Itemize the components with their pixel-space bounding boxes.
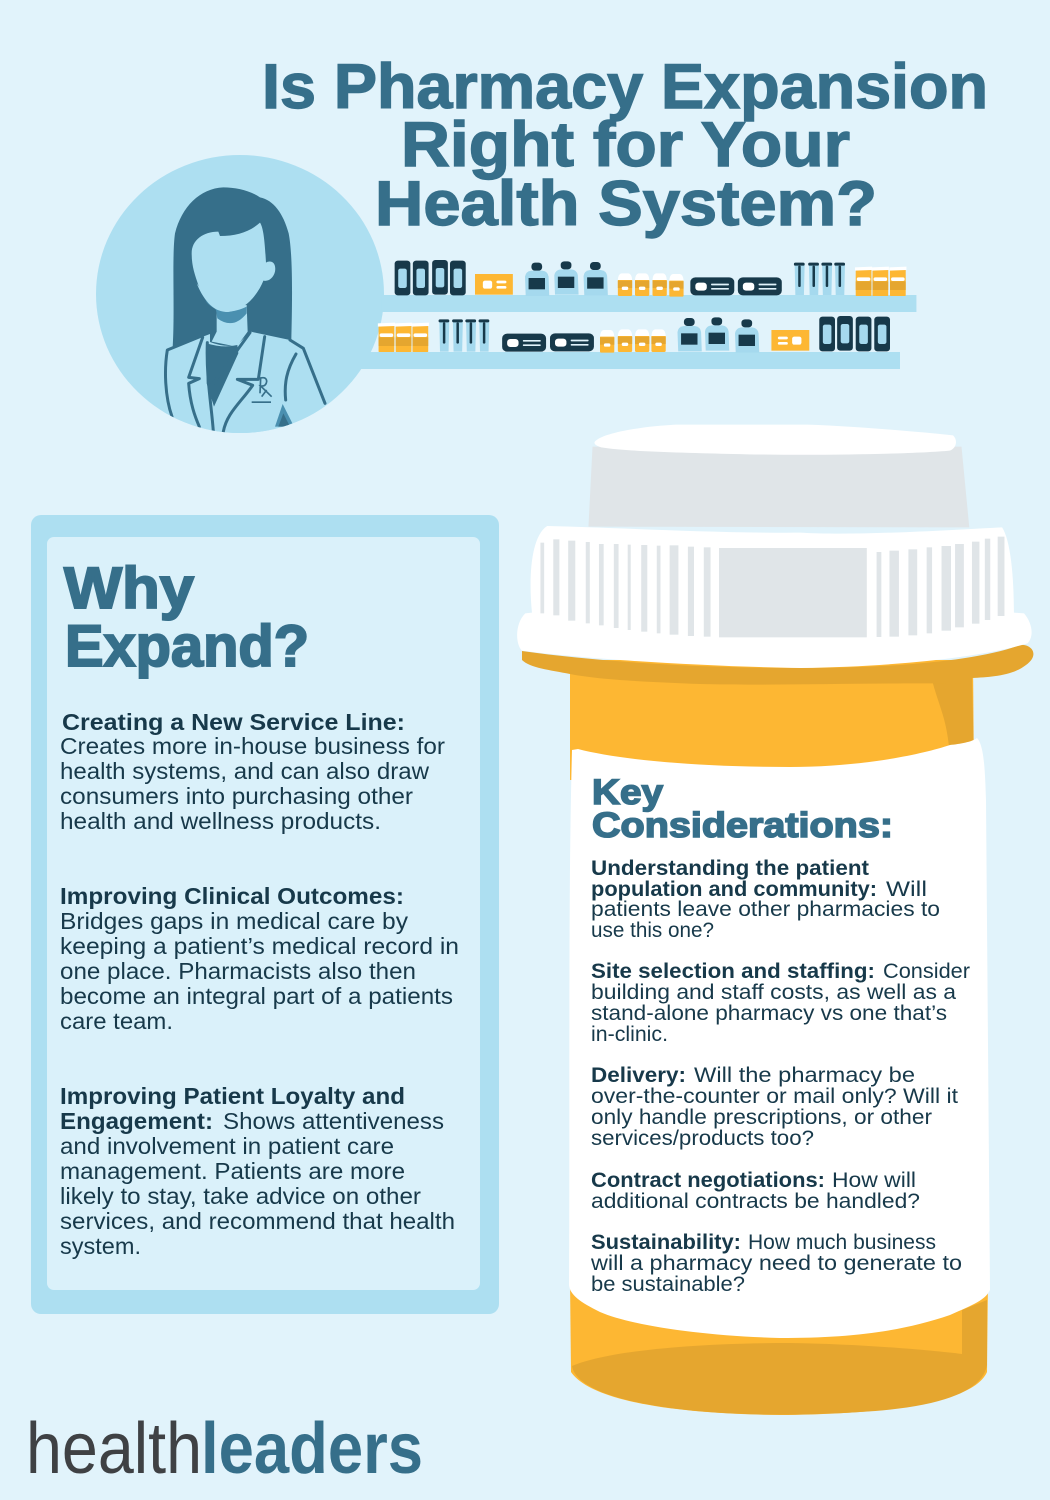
text: sustainability: Sustainability: [591, 1230, 741, 1254]
text: improving patient loyalty: system. [60, 1233, 141, 1259]
text: site selection: Site selection and staffing: [591, 959, 875, 983]
text: contract negotiations: additional contracts be handled? [591, 1189, 920, 1213]
text: site selection: stand-alone pharmacy vs one that’s [591, 1001, 947, 1025]
shelves with medicine [360, 260, 916, 369]
text: understanding the patient: Understanding the patient [591, 856, 869, 880]
logo: healthleaders [26, 1409, 423, 1489]
text: improving patient loyalty [60, 1083, 455, 1259]
text: creating a new service line: health systems, and can also draw [60, 758, 430, 784]
heading: key considerations [592, 773, 893, 845]
text: creating a new service line: Creates more in-house business for [60, 733, 445, 759]
text: sustainability: be sustainable? [591, 1272, 745, 1296]
text: site selection [591, 959, 970, 1046]
heading: why expand: Why [64, 556, 194, 621]
heading: key considerations: Key [592, 773, 664, 812]
text: contract negotiations [591, 1168, 920, 1213]
text: delivery: Will the pharmacy be [694, 1063, 915, 1087]
heading: key considerations: Considerations: [592, 806, 893, 845]
text: delivery: over-the-counter or mail only? Will it [591, 1084, 958, 1108]
text: creating a new service line [60, 709, 445, 834]
text: delivery: Delivery: [591, 1063, 686, 1087]
text: understanding the patient: use this one? [591, 918, 714, 942]
text: site selection: Consider [883, 959, 970, 983]
text: improving patient loyalty: and involvement in patient care [60, 1133, 394, 1159]
text: improving clinical outcomes: become an integral part of a patients [60, 983, 453, 1009]
text: understanding the patient: patients leave other pharmacies to [591, 897, 940, 921]
text: delivery [591, 1063, 958, 1150]
title: Health System? [375, 169, 877, 239]
text: contract negotiations: Contract negotiations: [591, 1168, 825, 1192]
title: Right for Your [401, 110, 850, 180]
text: understanding the patient: population and community: [591, 877, 877, 901]
title: Is Pharmacy Expansion [262, 52, 988, 122]
text: creating a new service line: health and wellness products. [60, 808, 381, 834]
text: sustainability: will a pharmacy need to generate to [590, 1251, 962, 1275]
circle portrait background [96, 155, 384, 433]
bottle body lower [570, 1280, 988, 1415]
text: improving clinical outcomes: Bridges gaps in medical care by [60, 908, 408, 934]
text: site selection: building and staff costs, as well as a [591, 980, 956, 1004]
text: understanding the patient: Will [886, 877, 927, 901]
bottle neck [570, 660, 974, 780]
text: key considerations [590, 773, 970, 1296]
text: delivery: services/products too? [591, 1126, 814, 1150]
text: improving patient loyalty: services, and recommend that health [60, 1208, 455, 1234]
text: improving clinical outcomes: one place. Pharmacists also then [60, 958, 416, 984]
logo: healthleaders: leaders [201, 1409, 423, 1489]
text: improving patient loyalty: management. Patients are more [60, 1158, 405, 1184]
icon: pharmacist [162, 187, 330, 443]
bottle cap [517, 425, 1032, 668]
text: improving clinical outcomes: Improving Clinical Outcomes: [60, 883, 404, 909]
icon: pill bottle [517, 425, 1033, 1415]
text: improving patient loyalty: Engagement: [60, 1108, 213, 1134]
heading: why expand [64, 556, 309, 679]
text: improving patient loyalty: Improving Patient Loyalty and [60, 1083, 405, 1109]
bottle label [569, 738, 990, 1338]
text: sustainability: How much business [748, 1230, 936, 1254]
panel: why expand [31, 515, 499, 1314]
text: creating a new service line: consumers into purchasing other [60, 783, 413, 809]
text: improving patient loyalty: Shows attentiveness [223, 1108, 444, 1134]
shelf: upper [381, 295, 916, 312]
text: improving clinical outcomes: care team. [60, 1008, 173, 1034]
text: improving clinical outcomes [60, 883, 459, 1034]
title [262, 52, 988, 239]
text: creating a new service line: Creating a New Service Line: [62, 709, 405, 735]
upper row items [395, 260, 906, 297]
logo: healthleaders: health [26, 1409, 202, 1489]
shelf: lower [360, 352, 900, 369]
text: contract negotiations: How will [832, 1168, 916, 1192]
text: improving patient loyalty: likely to stay, take advice on other [60, 1183, 421, 1209]
text: site selection: in-clinic. [591, 1022, 668, 1046]
text: delivery: only handle prescriptions, or other [591, 1105, 932, 1129]
text: improving clinical outcomes: keeping a patient’s medical record in [60, 933, 459, 959]
heading: why expand: Expand? [65, 614, 309, 679]
text: understanding the patient [591, 856, 940, 942]
text: sustainability [590, 1230, 962, 1296]
lower row items [378, 316, 890, 353]
